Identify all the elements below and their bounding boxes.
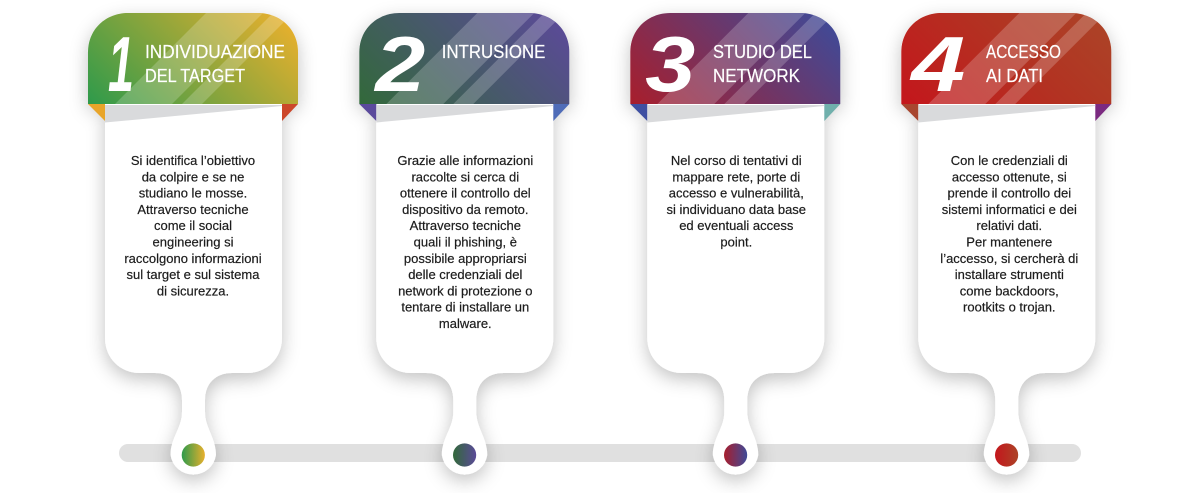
panel: step 1 [88, 13, 298, 475]
step description: relativi dati. [976, 218, 1042, 233]
timeline dot [995, 443, 1018, 467]
step description: come il social [154, 218, 232, 233]
ribbon fold left [359, 104, 376, 121]
step title: AI DATI [986, 65, 1043, 86]
step description: malware. [439, 316, 492, 331]
step number: 4 [909, 20, 965, 108]
step description: come backdoors, [960, 283, 1059, 298]
step description: l’accesso, si cercherà di [940, 251, 1078, 266]
grey ribbon strip [647, 105, 824, 122]
ribbon fold right [824, 104, 840, 121]
step description: accesso e vulnerabilità, [669, 186, 804, 201]
step description: da colpire e se ne [142, 169, 244, 184]
step description: ottenere il controllo del [400, 186, 531, 201]
header band [359, 13, 569, 104]
ribbon fold left [630, 104, 647, 121]
ribbon fold left [88, 104, 105, 121]
step description: installare strumenti [955, 267, 1064, 282]
step title: NETWORK [713, 65, 801, 86]
grey ribbon strip [918, 105, 1095, 122]
step description: si individuano data base [667, 202, 806, 217]
header band [88, 13, 298, 104]
step description: point. [720, 234, 752, 250]
step description: mappare rete, porte di [672, 169, 800, 184]
header band [630, 13, 840, 104]
step title: INDIVIDUAZIONE [145, 41, 285, 62]
card body and timeline node shape [630, 13, 840, 475]
step description: Attraverso tecniche [410, 218, 521, 233]
step description: raccolte si cerca di [411, 169, 519, 184]
panel: step 4 [901, 13, 1111, 475]
panel: step 3 [630, 13, 840, 475]
step description: Con le credenziali di [951, 153, 1068, 168]
step description: Grazie alle informazioni [397, 153, 533, 168]
card body and timeline node shape [359, 13, 569, 475]
timeline bar [119, 444, 1081, 462]
ribbon fold right [553, 104, 569, 121]
step description: network di protezione o [398, 283, 533, 298]
timeline dot [182, 443, 205, 467]
step description: Attraverso tecniche [137, 202, 249, 217]
step title: ACCESSO [986, 41, 1061, 62]
step description: accesso ottenute, si [952, 169, 1067, 184]
step description: ed eventuali access [679, 218, 794, 233]
step description: rootkits o trojan. [963, 300, 1056, 315]
step number: 3 [645, 20, 695, 108]
step description: quali il phishing, è [414, 234, 517, 250]
ribbon fold right [1095, 104, 1111, 121]
ribbon fold right [282, 104, 298, 121]
step description: prende il controllo dei [948, 186, 1071, 201]
step description: possibile appropriarsi [404, 251, 527, 266]
step description: Si identifica l’obiettivo [131, 153, 255, 168]
header band [901, 13, 1111, 104]
step description: engineering si [153, 234, 234, 250]
step description: delle credenziali del [408, 267, 522, 282]
step description: tentare di installare un [401, 300, 529, 315]
card body and timeline node shape [901, 13, 1111, 475]
timeline dot [453, 443, 476, 467]
step description: Nel corso di tentativi di [671, 153, 802, 168]
step description: raccolgono informazioni [124, 251, 262, 266]
grey ribbon strip [376, 105, 553, 122]
step description: sul target e sul sistema [127, 267, 260, 282]
panel: step 2 [359, 13, 569, 475]
step description: studiano le mosse. [139, 186, 247, 201]
step title: INTRUSIONE [442, 41, 545, 62]
step title: STUDIO DEL [713, 41, 812, 62]
step description: Per mantenere [966, 234, 1052, 250]
ribbon fold left [901, 104, 918, 121]
step description: dispositivo da remoto. [402, 202, 529, 217]
card body and timeline node shape [88, 13, 298, 475]
step description: di sicurezza. [157, 283, 229, 298]
grey ribbon strip [105, 105, 282, 122]
step title: DEL TARGET [145, 65, 245, 86]
step description: sistemi informatici e dei [942, 202, 1077, 217]
step number: 2 [373, 20, 425, 108]
timeline dot [724, 443, 747, 467]
step number: 1 [108, 20, 134, 108]
